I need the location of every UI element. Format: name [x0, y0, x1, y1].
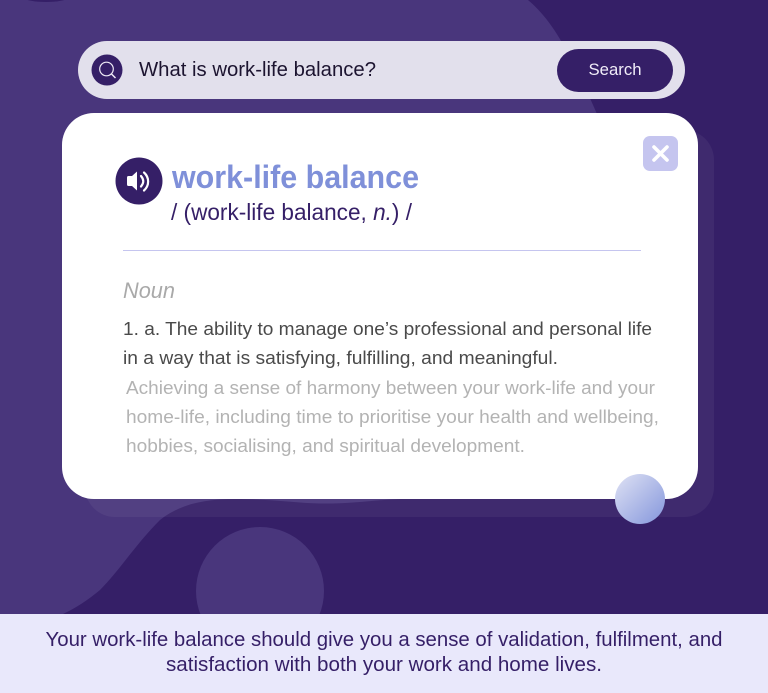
search button — [557, 49, 673, 92]
definition card — [62, 113, 698, 499]
decorative gradient ball — [615, 474, 665, 524]
icon: close button — [643, 136, 678, 171]
primary definition: 1. a. The ability to manage one’s professional and personal life — [123, 318, 652, 339]
search bar — [78, 41, 685, 99]
primary definition — [123, 318, 652, 368]
pronunciation: / (work-life balance, n.) / — [171, 199, 413, 225]
icon: speaker — [116, 158, 162, 204]
footer text — [46, 629, 722, 676]
secondary definition: home-life, including time to prioritise your health and wellbeing, — [126, 406, 659, 427]
footer band — [0, 614, 768, 693]
footer text: satisfaction with both your work and home lives. — [166, 654, 602, 676]
heading: work-life balance — [171, 159, 419, 195]
secondary definition: hobbies, socialising, and spiritual development. — [126, 435, 525, 456]
decorative circle — [196, 527, 324, 655]
word class: Noun — [123, 278, 175, 303]
primary definition: in a way that is satisfying, fulfilling, and meaningful. — [123, 347, 558, 368]
divider — [123, 250, 641, 251]
search button: Search — [588, 60, 642, 79]
card shadow panel — [85, 130, 714, 517]
secondary definition — [126, 377, 659, 456]
search query: What is work-life balance? — [139, 59, 376, 81]
icon: search — [92, 54, 122, 86]
footer text: Your work-life balance should give you a sense of validation, fulfilment, and — [46, 629, 722, 651]
secondary definition: Achieving a sense of harmony between your work-life and your — [126, 377, 655, 398]
